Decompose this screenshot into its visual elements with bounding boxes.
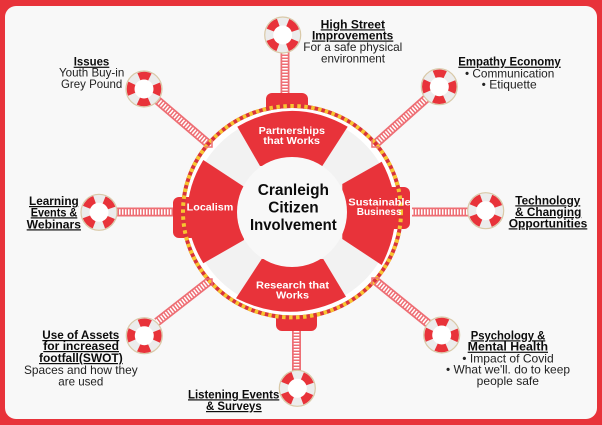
text: issues: Issues [74,55,110,69]
buoy: psychology [424,317,460,353]
buoy: learning events [74,187,124,238]
text: listening events: Listening Events [188,387,280,401]
text: psychology: Psychology & [471,328,546,342]
text: high street improvements [303,17,402,65]
text: learning events [27,194,81,231]
text: issues: Youth Buy-in [59,66,124,80]
buoy: use of assets [126,318,162,354]
text: psychology [446,328,570,388]
top and bottom handle tabs [266,93,317,331]
segment label: sustainable business [348,196,411,218]
text: empathy economy: • Communication [465,66,554,80]
text: psychology: • What we'll. do to keep [446,363,570,377]
connector ropes [116,50,470,372]
text: issues: Grey Pound [61,77,122,91]
text: technology: & Changing [515,205,581,219]
inner circle [237,157,347,267]
text: learning events: Events & [31,205,78,219]
buoy: technology [460,185,511,236]
segment label: partnerships [259,125,325,147]
text: use of assets: footfall(SWOT) [39,351,123,365]
text: use of assets: are used [58,374,103,388]
text: high street improvements: Improvements [312,28,394,42]
segment label: localism: Localism [187,201,233,213]
text: listening events: & Surveys [206,399,262,413]
title [250,182,337,234]
central lifebuoy [173,93,410,331]
text: use of assets [24,328,138,388]
text: learning events: Learning [29,194,79,208]
text: listening events [188,387,280,413]
text: high street improvements: High Street [321,17,385,31]
text: learning events: Webinars [27,217,81,231]
segment label: partnerships: Partnerships [259,125,325,137]
buoy: empathy economy [421,69,457,105]
text: technology: Opportunities [509,216,588,230]
rope ring [183,106,401,317]
text: high street improvements: environment [321,51,386,65]
segment label: research [256,279,330,301]
title: Involvement [250,217,337,234]
text: empathy economy: • Etiquette [482,78,537,92]
text: use of assets: for increased [43,339,119,353]
text: issues [59,55,124,91]
segment label: sustainable business: Business [357,206,402,218]
segment label: sustainable business: Sustainable [348,196,411,208]
text: use of assets: Use of Assets [42,328,120,342]
text: technology: Technology [515,193,581,207]
segment label: research: Research that [256,279,330,291]
buoy: listening events [272,363,323,414]
rope arrow tips [205,140,379,286]
text: technology [509,193,588,230]
title: Citizen [268,200,319,217]
buoy: high street [257,10,308,60]
text: psychology: people safe [477,374,539,388]
text: psychology: Mental Health [468,340,548,354]
segment label: research: Works [276,289,309,301]
text: high street improvements: For a safe physical [303,40,402,54]
side handle tabs [173,187,410,238]
text: empathy economy [458,55,561,92]
buoy: issues [126,71,162,107]
grey ring [191,114,393,310]
segment label: partnerships: that Works [263,135,320,147]
text: empathy economy: Empathy Economy [458,55,561,69]
title: Cranleigh [258,182,329,199]
text: use of assets: Spaces and how they [24,363,138,377]
red segments [188,111,395,312]
white ring [185,108,399,316]
text: psychology: • Impact of Covid [462,351,554,365]
